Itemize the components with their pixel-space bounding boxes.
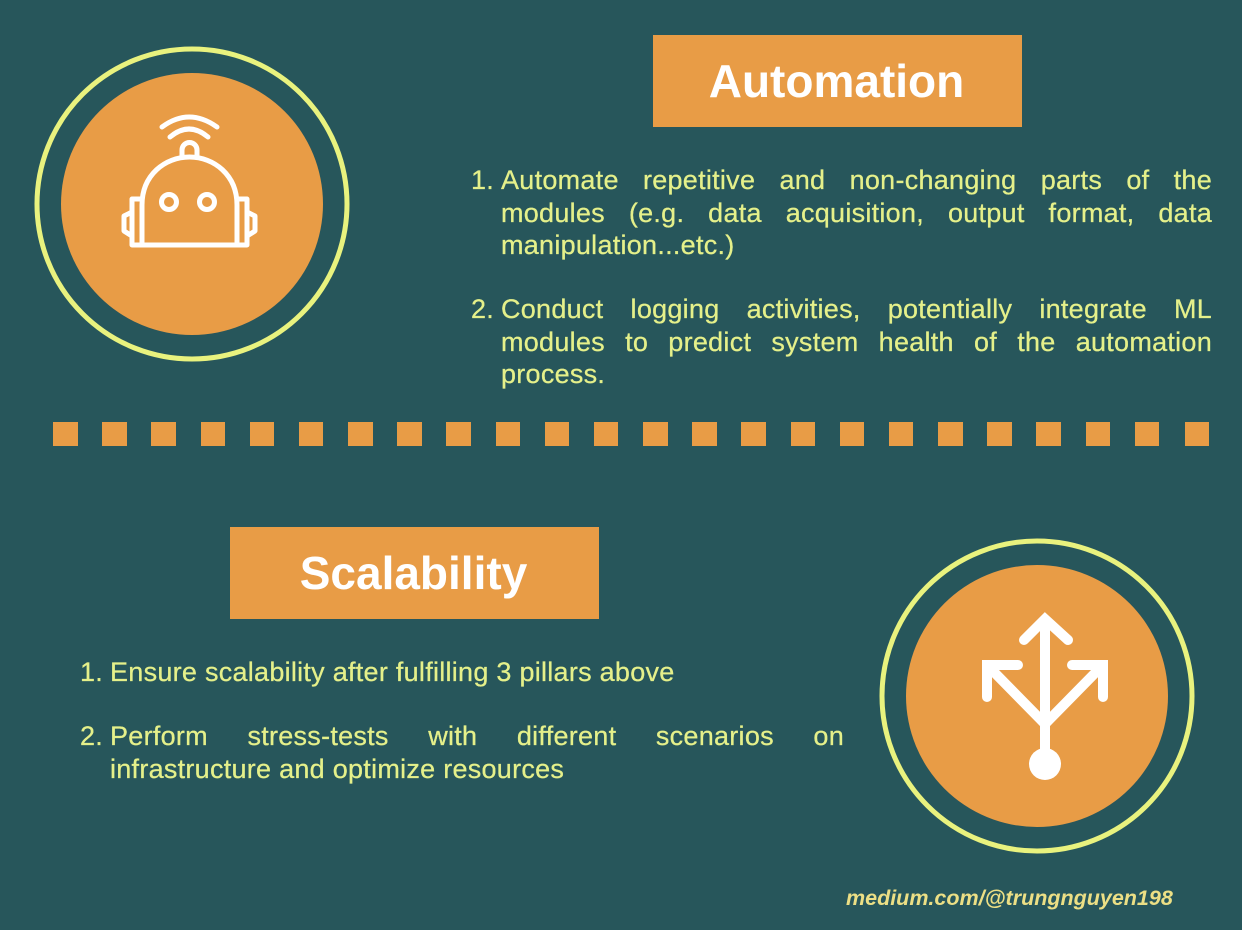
text: automation list: Conduct logging activities, potentially integrate ML — [501, 294, 1212, 324]
heading: Scalability — [230, 527, 599, 619]
icon: scaling arrows medallion — [880, 538, 1194, 854]
text: automation list: modules (e.g. data acquisition, output format, data — [501, 198, 1212, 228]
text: automation list — [471, 165, 1212, 389]
heading: Scalability: Scalability — [300, 547, 527, 599]
text: scalability list: 2. — [80, 721, 103, 751]
text: scalability list — [80, 657, 844, 784]
text: scalability list: 1. — [80, 657, 103, 687]
heading: Automation: Automation — [709, 55, 964, 107]
icon: robot medallion — [34, 46, 350, 362]
text: automation list: 2. — [471, 294, 494, 324]
heading: Automation — [653, 35, 1022, 127]
credit: medium link: medium.com/@trungnguyen198 — [846, 886, 1173, 910]
text: scalability list: Perform stress-tests with different scenarios on — [110, 721, 844, 751]
text: scalability list: Ensure scalability after fulfilling 3 pillars above — [110, 657, 675, 687]
dotted divider — [53, 422, 1209, 446]
text: automation list: 1. — [471, 165, 494, 195]
text: automation list: manipulation...etc.) — [501, 230, 735, 260]
text: automation list: Automate repetitive and non-changing parts of the — [501, 165, 1212, 195]
text: automation list: process. — [501, 359, 605, 389]
text: scalability list: infrastructure and optimize resources — [110, 754, 564, 784]
text: automation list: modules to predict system health of the automation — [501, 326, 1212, 356]
